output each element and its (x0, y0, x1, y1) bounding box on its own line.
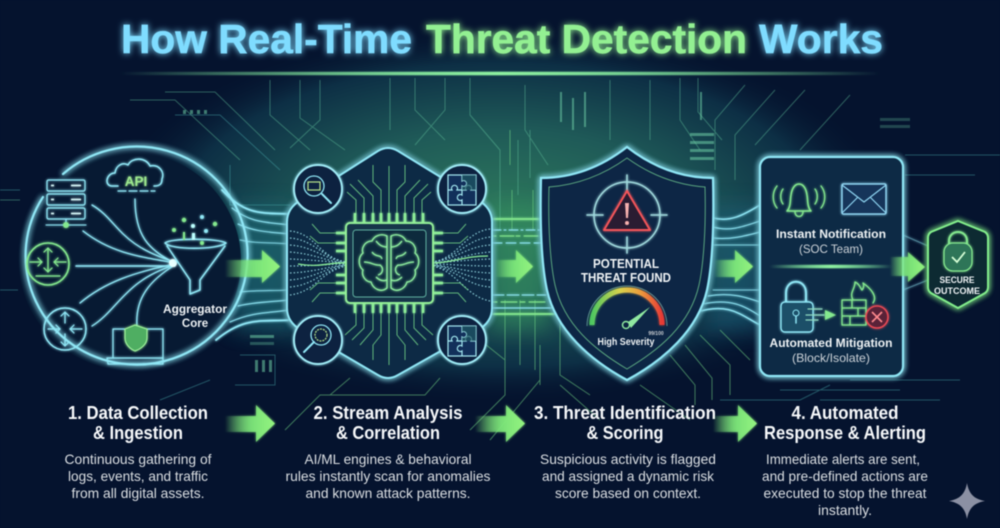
icon: funnel (165, 215, 226, 294)
data flow lines: response to outcome (903, 235, 928, 290)
step 1 text: 1. Data Collection (68, 402, 208, 423)
step 3 text: & Scoring (586, 422, 664, 443)
label: potential threat found (581, 257, 671, 285)
arrow: ingestion to analysis (225, 250, 280, 283)
shield outline (541, 147, 713, 380)
step 1 text: Continuous gathering of (64, 451, 212, 467)
icon: laptop with shield (107, 325, 163, 364)
label: aggregator core: Aggregator (163, 304, 228, 316)
step 2 text: rules instantly scan for anomalies (286, 468, 490, 484)
icon: router (44, 308, 86, 350)
step 4 text: Response & Alerting (764, 422, 926, 443)
title: Works (759, 16, 883, 62)
arrow: step 2 to step 3 (475, 405, 525, 442)
label: automated mitigation (770, 336, 892, 365)
label: instant notification: (SOC Team) (799, 242, 863, 256)
circle outline (26, 147, 248, 365)
panel divider (770, 265, 892, 268)
step 2 text: and known attack patterns. (306, 485, 470, 501)
mesh wave left (290, 231, 346, 295)
step 2 text: & Correlation (336, 422, 440, 443)
icon: burning firewall (842, 282, 888, 328)
icon: bell (773, 184, 825, 216)
icon: servers (46, 180, 86, 228)
icon: sparkle watermark (949, 483, 985, 519)
mesh wave right (433, 229, 490, 301)
step 2 text: AI/ML engines & behavioral (304, 451, 472, 467)
label: instant notification (776, 227, 886, 256)
converging data streams (76, 199, 177, 326)
label: instant notification: Instant Notification (776, 227, 886, 241)
label: secure outcome (934, 275, 980, 297)
data flow lines: ingestion to analysis (216, 190, 290, 340)
step 1 text (64, 402, 212, 501)
icon: switch (27, 243, 69, 285)
step 1 panel: data sources (19, 147, 248, 370)
title divider (120, 72, 880, 75)
icon: lock with check (944, 232, 972, 271)
circuit board traces background (0, 78, 1000, 440)
label: automated mitigation: Automated Mitigation (770, 336, 892, 350)
step 1 text: from all digital assets. (72, 485, 204, 501)
step 3 text: and assigned a dynamic risk (542, 468, 715, 484)
icon: target crosshair (587, 175, 667, 253)
chip (346, 223, 433, 303)
step 2 text (286, 402, 490, 501)
data flow lines: identification to response (697, 205, 760, 325)
step 4 text (762, 402, 928, 518)
icon: warning triangle (604, 191, 650, 230)
arrow: step 3 to step 4 (713, 405, 757, 442)
step 3 text (534, 402, 716, 501)
severity gauge (587, 286, 667, 337)
icon: puzzle top right (438, 165, 486, 213)
icon: API cloud (107, 159, 163, 191)
circuit traces from chip (310, 165, 468, 365)
shield inner line (549, 158, 705, 369)
step 3 text: Suspicious activity is flagged (540, 451, 716, 467)
decorative data ticks (183, 92, 910, 372)
chip pins (336, 213, 443, 313)
step 1 text: logs, events, and traffic (68, 468, 208, 484)
icon: API cloud: API (125, 174, 147, 189)
icon: search bottom left (294, 316, 342, 364)
icon: search top left (294, 165, 342, 213)
label: potential threat found: POTENTIAL (593, 257, 659, 271)
label: automated mitigation: (Block/Isolate) (792, 351, 870, 365)
arrow: identification to response (714, 250, 753, 283)
label: aggregator core: Core (182, 318, 208, 330)
label: secure outcome: SECURE (940, 275, 974, 286)
secure outcome badge (928, 221, 988, 308)
label: secure outcome: OUTCOME (934, 286, 980, 297)
title (121, 16, 883, 62)
label: high severity: High Severity (598, 337, 655, 348)
step 2 text: 2. Stream Analysis (314, 402, 462, 423)
icon: brain (359, 235, 419, 290)
step 4 text: instantly. (818, 502, 872, 518)
step 4 text: Immediate alerts are sent, (766, 451, 920, 467)
arrow: analysis to identification (495, 250, 533, 283)
step 4 text: and pre-defined actions are (762, 468, 928, 484)
title: Threat Detection (426, 16, 747, 62)
hexagon body (287, 148, 492, 378)
arrow: response to outcome (890, 252, 925, 282)
label: potential threat found: THREAT FOUND (581, 271, 671, 285)
title: How Real-Time (121, 16, 412, 62)
step 3 text: score based on context. (555, 485, 701, 501)
data flow lines: analysis to identification (492, 219, 556, 314)
step 4 text: 4. Automated (792, 402, 898, 423)
severity gauge: 99/100 (648, 331, 664, 337)
icon: padlock and arrow (781, 282, 836, 332)
step 1 text: & Ingestion (93, 422, 183, 443)
arrow: step 1 to step 2 (225, 405, 275, 442)
icon: envelope (842, 184, 886, 214)
icon: puzzle bottom right (438, 316, 486, 364)
step 4 text: executed to stop the threat (764, 485, 927, 501)
step 4 panel: response (760, 157, 903, 376)
step 3 panel: threat shield (541, 147, 713, 380)
step 3 text: 3. Threat Identification (534, 402, 716, 423)
step 2 panel: analysis hexagon (287, 148, 492, 378)
label: aggregator core (163, 304, 228, 330)
